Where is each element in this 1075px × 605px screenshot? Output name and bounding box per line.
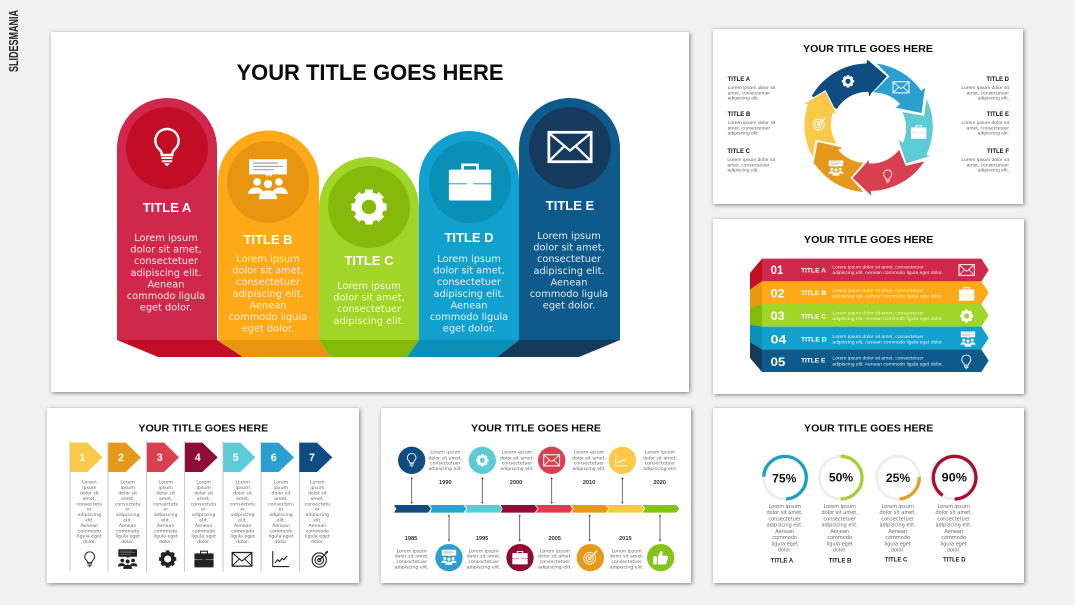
step 3: er [163, 507, 168, 513]
step 5: dolor. [236, 539, 249, 545]
step 5: elit. [238, 517, 247, 523]
bottom descriptions: Lorem ipsum [397, 548, 427, 554]
step 6: dolor. [275, 539, 287, 545]
ribbon folds [750, 259, 762, 372]
ring 90% [931, 456, 976, 564]
step 2: dolor sit [118, 490, 137, 496]
left labels: amet, consectetuer [728, 125, 770, 131]
ribbon 01: TITLE A [801, 267, 826, 274]
top descriptions: Lorem ipsum [430, 450, 461, 456]
step 3: Aenean [157, 523, 175, 529]
ribbon 04: TITLE D [801, 336, 827, 343]
ring 25%: ligula eget [884, 541, 911, 547]
step 7: commodo [306, 528, 329, 534]
step 2: 2 [118, 452, 124, 464]
column D: commodo ligula [430, 312, 508, 323]
ring 75%: TITLE A [771, 558, 794, 564]
top descriptions: dolor sit amet, [643, 455, 677, 461]
step 7: adipiscing [306, 512, 329, 518]
step 7: ligula eget [305, 534, 330, 540]
step 2: ipsum [121, 485, 135, 491]
bottom descriptions: Lorem ipsum [469, 548, 499, 554]
step 6: elit. [277, 517, 285, 523]
ribbon 03: TITLE C [801, 314, 826, 321]
ribbon 04: adipiscing elit. Aenean commodo ligula eget dolor. [832, 340, 943, 346]
step 4: elit. [199, 517, 208, 523]
ribbon 05 [762, 349, 989, 372]
ring 75% [764, 456, 806, 564]
ring 50% [819, 456, 862, 564]
top descriptions: Lorem ipsum [502, 450, 533, 456]
column E: Lorem ipsum [537, 231, 601, 242]
column D: dolor sit amet, [433, 266, 505, 277]
year labels: 1985 [405, 536, 417, 542]
connector arrows [410, 477, 661, 542]
bottom descriptions: dolor sit amet, [395, 554, 429, 560]
top descriptions: Lorem ipsum [574, 450, 605, 456]
year labels: 2020 [653, 480, 666, 486]
ring 90%: adipiscing elit. [936, 523, 972, 529]
step 7: dolor sit [308, 490, 327, 496]
right labels: adipiscing elit. [978, 96, 1009, 102]
bottom descriptions: consectetuer [540, 559, 570, 565]
ring 50%: TITLE B [829, 558, 852, 564]
step 6: adipiscing [269, 512, 293, 518]
step 2: er [125, 507, 130, 513]
ring 90%: dolor sit amet, [936, 510, 972, 516]
step 3: ipsum [159, 485, 173, 491]
column A: TITLE A [143, 200, 192, 215]
top descriptions [428, 450, 677, 472]
bottom descriptions: adipiscing elit. [538, 564, 572, 570]
year labels: 2010 [583, 480, 595, 486]
top descriptions: dolor sit amet, [428, 455, 463, 461]
column D [419, 131, 519, 340]
ring 75%: commodo [772, 535, 797, 541]
step 1: consectetu [76, 501, 102, 507]
left labels: TITLE A [728, 77, 751, 83]
step 6: Aenean [272, 523, 290, 529]
step 6: ipsum [274, 485, 289, 491]
step 1: er [87, 507, 92, 513]
column E: TITLE E [546, 198, 595, 213]
step 6: er [279, 507, 283, 513]
step 2: commodo [116, 528, 139, 534]
column divider lines [70, 441, 299, 572]
ring 50%: ligula eget [826, 541, 853, 547]
ring 75%: dolor. [778, 548, 792, 554]
ring 25%: adipiscing elit. [880, 523, 916, 529]
step 3: adipiscing [154, 512, 177, 518]
step 4: 4 [195, 452, 201, 464]
step 2: dolor. [121, 539, 134, 545]
step 3: Lorem [158, 480, 173, 486]
ring 25%: TITLE C [885, 558, 908, 564]
top descriptions: adipiscing elit. [643, 466, 677, 472]
column A: Lorem ipsum [134, 233, 198, 244]
column E: commodo ligula [530, 289, 608, 300]
step 5: ligula eget [230, 534, 255, 540]
ribbon 04 [762, 327, 989, 349]
ring 50%: Aenean [830, 529, 849, 535]
bottom descriptions: consectetuer [396, 559, 427, 565]
top descriptions: adipiscing elit. [572, 466, 606, 472]
step 2: adipiscing [116, 512, 139, 518]
column C: adipiscing elit. [333, 316, 405, 327]
right labels: Lorem ipsum dolor sit [961, 85, 1010, 91]
ring 75%: dolor sit amet, [767, 510, 803, 516]
ring 90%: Lorem ipsum [937, 504, 970, 510]
step 7: ipsum [310, 485, 325, 491]
panel: timeline [381, 408, 691, 583]
ribbon 05: Lorem ipsum dolor sit amet, consectetuer [832, 356, 924, 362]
step 1: ipsum [82, 485, 97, 491]
ribbon 03: adipiscing elit. Aenean commodo ligula eget dolor. [832, 316, 943, 322]
bottom event circles [435, 544, 674, 571]
ribbon 04: 04 [771, 332, 787, 346]
bottom descriptions: dolor sit amet, [538, 554, 572, 560]
step 7: Lorem [310, 480, 325, 486]
top descriptions: dolor sit amet, [572, 455, 606, 461]
step 7: Aenean [309, 523, 326, 529]
step 5: dolor sit [233, 490, 252, 496]
year labels: 2015 [619, 536, 632, 542]
right labels: Lorem ipsum dolor sit [961, 157, 1010, 163]
column B: adipiscing elit. [232, 289, 304, 300]
step 6: 6 [271, 452, 277, 464]
top descriptions: adipiscing elit. [500, 466, 534, 472]
title: YOUR TITLE GOES HERE [471, 424, 601, 435]
ring 90%: Aenean [944, 529, 963, 535]
step 2 [108, 443, 141, 569]
column E: Aenean [550, 277, 588, 288]
ring icons [813, 75, 926, 183]
left labels: amet, consectetuer [727, 162, 770, 168]
ribbon 01: Lorem ipsum dolor sit amet, consectetuer [832, 264, 924, 270]
step 3: amet, [159, 496, 173, 502]
step 1 [70, 443, 103, 567]
title: YOUR TITLE GOES HERE [804, 235, 933, 246]
left labels: Lorem ipsum dolor sit [728, 85, 776, 91]
bottom descriptions: consectetuer [468, 559, 499, 565]
ribbon 02: 02 [771, 286, 785, 300]
right labels: amet, consectetuer [967, 162, 1009, 168]
left labels: TITLE B [728, 112, 751, 118]
column D: Aenean [450, 300, 488, 311]
step 7: er [315, 507, 320, 513]
ring 75%: 75% [772, 471, 797, 485]
ribbon 02: adipiscing elit. Aenean commodo ligula eget dolor. [832, 294, 943, 300]
column E: adipiscing elit. [533, 266, 605, 277]
step 6: ligula eget [269, 534, 293, 540]
column E: dolor sit amet, [533, 243, 605, 254]
top descriptions: adipiscing elit. [428, 466, 462, 472]
column B: Aenean [249, 300, 287, 311]
ribbon 02 [762, 281, 989, 304]
step 3: elit. [161, 517, 170, 523]
step 5 [223, 443, 256, 566]
ring 75%: ligula eget [771, 541, 798, 547]
right labels: Lorem ipsum dolor sit [961, 120, 1010, 126]
ring 25%: Lorem ipsum [881, 504, 914, 510]
step 5: commodo [231, 528, 254, 534]
step 3: commodo [154, 528, 177, 534]
ring 50%: Lorem ipsum [823, 504, 856, 510]
ring 25%: consectetuer [881, 516, 915, 522]
step 5: 5 [233, 452, 239, 464]
bottom descriptions: dolor sit amet, [467, 554, 501, 560]
step 7: dolor. [311, 539, 324, 545]
step 5: ipsum [236, 485, 250, 491]
year labels: 1990 [439, 480, 452, 486]
step 5: adipiscing [231, 512, 254, 518]
timeline bar [394, 505, 679, 513]
year labels [405, 480, 666, 542]
title: YOUR TITLE GOES HERE [804, 423, 933, 434]
step 5: Aenean [234, 523, 252, 529]
ring 75%: consectetuer [768, 516, 802, 522]
ribbon 01: adipiscing elit. Aenean commodo ligula eget dolor. [832, 270, 943, 276]
bottom descriptions: adipiscing elit. [467, 564, 501, 570]
step 4: er [201, 507, 206, 513]
top descriptions: consectetuer [502, 461, 532, 467]
column A: eget dolor. [140, 303, 192, 314]
ribbon 04: Lorem ipsum dolor sit amet, consectetuer [832, 334, 924, 340]
step 4: commodo [192, 528, 215, 534]
step 2: Lorem [120, 480, 135, 486]
step 2: elit. [123, 517, 132, 523]
step 6: Lorem [274, 480, 289, 486]
left labels: TITLE C [727, 149, 751, 155]
ring 75%: Lorem ipsum [768, 504, 801, 510]
column D: eget dolor. [443, 324, 495, 335]
panel: circular arrows [713, 29, 1023, 204]
year labels: 2005 [548, 536, 561, 542]
step 4: Lorem [196, 480, 211, 486]
ring 50%: 50% [829, 471, 854, 485]
bottom descriptions: adipiscing elit. [610, 564, 644, 570]
column base folds [117, 340, 620, 357]
ribbon 01 [762, 259, 989, 281]
top descriptions: consectetuer [574, 461, 604, 467]
column C: Lorem ipsum [337, 281, 401, 292]
column D: consectetuer [437, 277, 502, 288]
left labels: adipiscing elit. [728, 131, 759, 137]
top descriptions: consectetuer [645, 461, 675, 467]
step 3: 3 [157, 452, 163, 464]
step 1: elit. [85, 517, 94, 523]
left labels [727, 77, 776, 174]
ribbon 03: 03 [771, 309, 785, 323]
bottom descriptions: consectetuer [611, 559, 642, 565]
left labels: Lorem ipsum dolor sit [727, 157, 776, 163]
step 6: dolor sit [272, 490, 291, 496]
right labels: TITLE E [987, 112, 1009, 118]
step 7: amet, [311, 496, 325, 502]
ribbon 02: TITLE B [801, 290, 826, 297]
right labels: TITLE D [986, 77, 1010, 83]
top event circles [398, 447, 636, 474]
step 6 [261, 443, 294, 567]
step 5: er [240, 507, 245, 513]
top descriptions: Lorem ipsum [645, 450, 676, 456]
year labels: 2000 [510, 480, 522, 486]
column B: consectetuer [236, 277, 301, 288]
top descriptions: consectetuer [430, 461, 461, 467]
step 7: elit. [313, 517, 322, 523]
right labels [961, 77, 1010, 174]
right labels: TITLE F [987, 149, 1009, 155]
step 5: Lorem [235, 480, 250, 486]
ring 50%: commodo [827, 535, 852, 541]
ring 25%: 25% [886, 471, 910, 485]
column D: adipiscing elit. [433, 289, 505, 300]
panel: percentage rings [713, 408, 1024, 583]
left labels: amet, consectetuer [728, 90, 770, 96]
ring 90%: dolor. [947, 548, 961, 554]
bottom descriptions [395, 548, 644, 570]
step 3: consectetu [153, 501, 179, 507]
column B: dolor sit amet, [232, 266, 304, 277]
step 4: dolor. [197, 539, 210, 545]
step 3 [147, 443, 179, 568]
bottom descriptions: Lorem ipsum [612, 548, 642, 554]
ribbon 02: Lorem ipsum dolor sit amet, consectetuer [832, 288, 924, 294]
step 7: 7 [309, 452, 315, 464]
step 3: ligula eget [153, 534, 178, 540]
step 1: Lorem [82, 480, 97, 486]
step 1: 1 [79, 452, 85, 464]
ring 50%: dolor sit amet, [822, 510, 858, 516]
bottom descriptions: dolor sit amet, [610, 554, 644, 560]
ring 90%: consectetuer [937, 516, 971, 522]
right labels: adipiscing elit. [978, 168, 1009, 174]
column A: consectetuer [134, 256, 199, 267]
column E: consectetuer [537, 254, 602, 265]
ring 90%: 90% [942, 470, 967, 484]
left labels: adipiscing elit. [728, 96, 759, 102]
column B: Lorem ipsum [236, 254, 300, 265]
column C: dolor sit amet, [333, 293, 405, 304]
column A: adipiscing elit. [130, 268, 202, 279]
right labels: amet, consectetuer [967, 125, 1009, 131]
step 3: dolor. [159, 539, 172, 545]
step 4: consectetu [191, 501, 217, 507]
ribbon 05: 05 [771, 355, 786, 369]
ring 25%: dolor sit amet, [880, 510, 916, 516]
title: YOUR TITLE GOES HERE [138, 424, 268, 435]
panel: seven numbered columns [47, 408, 359, 583]
ring 25%: dolor. [891, 548, 905, 554]
step 3: dolor sit [156, 490, 175, 496]
ribbon 03: Lorem ipsum dolor sit amet, consectetuer [832, 310, 924, 316]
step 2: consectetu [115, 501, 141, 507]
step 4: ligula eget [191, 534, 216, 540]
bottom descriptions: Lorem ipsum [540, 548, 571, 554]
step 1: adipiscing [78, 512, 101, 518]
ribbon 01: 01 [771, 263, 784, 277]
column C: consectetuer [337, 304, 402, 315]
step 4: dolor sit [194, 490, 213, 496]
step 4: Aenean [195, 523, 213, 529]
ring 75%: adipiscing elit. [767, 523, 803, 529]
top descriptions: dolor sit amet, [500, 455, 534, 461]
step 7: consectetu [304, 501, 330, 507]
left labels: Lorem ipsum dolor sit [728, 120, 776, 126]
step 7 [299, 443, 332, 567]
step 1: Aenean [81, 523, 98, 529]
step 4: amet, [197, 496, 211, 502]
step 1: ligula eget [77, 534, 102, 540]
step 2: ligula eget [115, 534, 140, 540]
column B: TITLE B [243, 232, 293, 247]
ring 90%: commodo [941, 535, 966, 541]
step 6: commodo [269, 528, 293, 534]
ribbon 05: adipiscing elit. Aenean commodo ligula eget dolor. [832, 361, 943, 367]
panel: five column arches [51, 32, 689, 392]
column D: Lorem ipsum [437, 254, 501, 265]
column D: TITLE D [444, 230, 494, 245]
step 6: amet, [274, 496, 288, 502]
left labels: adipiscing elit. [727, 168, 759, 174]
step 2: Aenean [119, 523, 137, 529]
step 1: commodo [78, 528, 101, 534]
ring of six arrows [802, 59, 933, 197]
step 1: dolor. [83, 539, 96, 545]
column A [117, 98, 217, 340]
column E: eget dolor. [543, 301, 595, 312]
year labels: 1995 [476, 536, 488, 542]
column A: dolor sit amet, [130, 245, 202, 256]
column B: commodo ligula [229, 312, 307, 323]
right labels: adipiscing elit. [978, 131, 1009, 137]
step 6: consectetu [268, 501, 294, 507]
bottom descriptions: adipiscing elit. [395, 564, 429, 570]
step 1: dolor sit [80, 490, 99, 496]
ribbon 05: TITLE E [801, 358, 825, 365]
column C [319, 157, 419, 340]
step 5: consectetu [230, 501, 256, 507]
ring 50%: adipiscing elit. [822, 523, 858, 529]
ring 25%: commodo [885, 535, 910, 541]
ring 50%: dolor. [833, 548, 847, 554]
main title: YOUR TITLE GOES HERE [236, 60, 504, 85]
column A: commodo ligula [127, 291, 205, 302]
step 4: ipsum [197, 485, 211, 491]
ring 90%: ligula eget [940, 541, 967, 547]
ring 50%: consectetuer [823, 516, 857, 522]
step 2: amet, [121, 496, 135, 502]
ring 90%: TITLE D [943, 558, 966, 564]
panel: five stacked ribbons [713, 219, 1024, 394]
ring 25% [877, 456, 919, 564]
column E [519, 98, 620, 340]
column C: TITLE C [344, 253, 394, 268]
right labels: amet, consectetuer [967, 90, 1009, 96]
step 5: amet, [236, 496, 250, 502]
step 4 [185, 443, 218, 567]
title: YOUR TITLE GOES HERE [803, 44, 933, 55]
ribbon 03 [762, 304, 989, 327]
step 1: amet, [83, 496, 97, 502]
column A: Aenean [147, 279, 185, 290]
column B: eget dolor. [242, 324, 294, 335]
ring 25%: Aenean [888, 529, 907, 535]
step 4: adipiscing [192, 512, 215, 518]
ring 75%: Aenean [775, 529, 794, 535]
column B [218, 130, 319, 340]
